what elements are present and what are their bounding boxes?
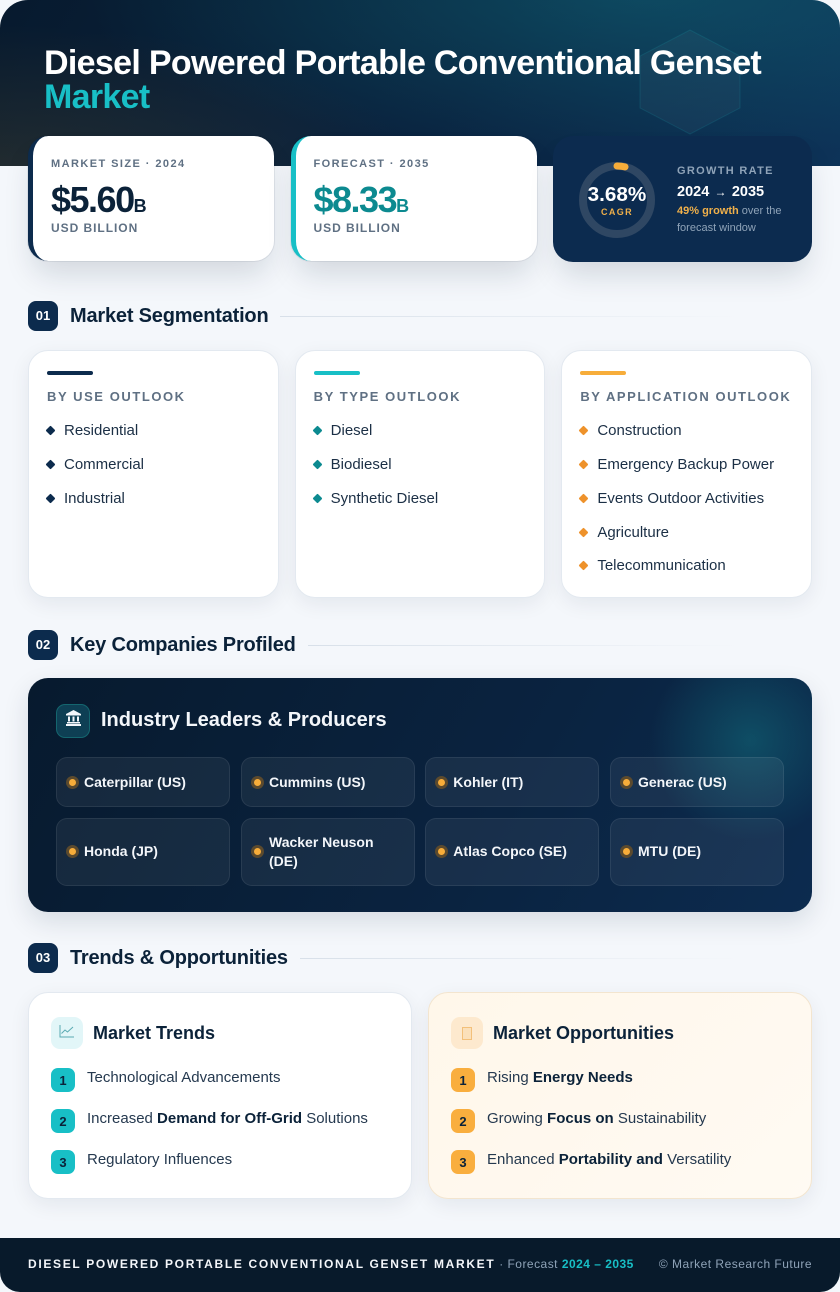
KPI card: forecast 2035: $8.33B xyxy=(314,179,409,220)
CAGR ring xyxy=(579,162,655,238)
title: Market xyxy=(44,78,150,116)
panel: market trends xyxy=(28,992,412,1199)
company chip xyxy=(56,757,230,807)
panel: by type outlook xyxy=(295,350,545,598)
KPI card: market size 2024: USD BILLION xyxy=(51,221,138,235)
section number 03 xyxy=(28,943,58,973)
panel: by use outlook: Commercial xyxy=(64,456,144,473)
section number 01: 01 xyxy=(36,308,50,323)
panel: market trends: Increased Demand for Off-Grid Solutions xyxy=(87,1110,368,1127)
growth note: 49% growth over the xyxy=(677,205,782,217)
CAGR value: 3.68% xyxy=(588,183,646,206)
icon: institution xyxy=(56,704,90,738)
company chip: Atlas Copco (SE) xyxy=(453,843,567,859)
panel: industry leaders xyxy=(28,678,812,912)
section number 01 xyxy=(28,301,58,331)
KPI card: market size 2024: $5.60B xyxy=(51,179,147,220)
panel: by type outlook: Biodiesel xyxy=(331,456,392,473)
trend 1 xyxy=(51,1068,75,1092)
panel: by type outlook: Diesel xyxy=(331,422,372,439)
company chip xyxy=(610,818,784,886)
title xyxy=(44,44,762,116)
panel: by use outlook xyxy=(28,350,279,598)
growth note xyxy=(677,205,782,234)
company chip: Generac (US) xyxy=(638,774,727,790)
CAGR label: CAGR xyxy=(601,207,633,217)
header banner xyxy=(0,0,840,166)
footer title: DIESEL POWERED PORTABLE CONVENTIONAL GENSET MARKET · Forecast 2024 – 2035 xyxy=(28,1257,634,1271)
panel: market opportunities: Rising Energy Needs xyxy=(487,1069,633,1086)
heading: trends: Trends & Opportunities xyxy=(70,947,288,969)
company chip: MTU (DE) xyxy=(638,843,701,859)
panel: by application outlook: Agriculture xyxy=(597,524,669,541)
section number 02 xyxy=(28,630,58,660)
trend 2: 2 xyxy=(59,1114,67,1129)
icon: opportunity glyph xyxy=(451,1017,483,1049)
company chip: Kohler (IT) xyxy=(453,774,523,790)
opportunity 3: 3 xyxy=(459,1155,467,1170)
section number 02: 02 xyxy=(36,637,50,652)
panel: by type outlook: BY TYPE OUTLOOK xyxy=(314,389,461,404)
panel: market opportunities xyxy=(428,992,812,1199)
KPI card: market size 2024 xyxy=(28,136,274,261)
growth rate label: GROWTH RATE xyxy=(677,165,774,177)
panel: market trends: Regulatory Influences xyxy=(87,1151,232,1168)
panel: by application outlook: Emergency Backup Power xyxy=(597,456,774,473)
panel: by application outlook: BY APPLICATION OUTLOOK xyxy=(580,389,791,404)
card heading: Market Trends xyxy=(93,1023,215,1043)
KPI card: market size 2024: MARKET SIZE · 2024 xyxy=(51,158,186,170)
panel: market trends: Technological Advancements xyxy=(87,1069,280,1086)
panel: by application outlook: Telecommunication xyxy=(597,557,726,574)
icon: hexagon watermark xyxy=(640,30,740,134)
trend 3: 3 xyxy=(59,1155,67,1170)
panel: by application outlook xyxy=(561,350,812,598)
trend 2 xyxy=(51,1109,75,1133)
opportunity 2 xyxy=(451,1109,475,1133)
company chip: Caterpillar (US) xyxy=(84,774,186,790)
growth years: → xyxy=(715,185,727,199)
panel heading: Industry Leaders & Producers xyxy=(101,709,387,731)
panel: by use outlook: BY USE OUTLOOK xyxy=(47,389,186,404)
KPI card: forecast 2035: FORECAST · 2035 xyxy=(314,158,430,170)
panel: by use outlook: Industrial xyxy=(64,490,125,507)
company chip: Cummins (US) xyxy=(269,774,365,790)
company chip xyxy=(241,757,415,807)
title: Diesel Powered Portable Conventional Genset xyxy=(44,44,761,82)
footer xyxy=(0,1238,840,1292)
icon: line chart xyxy=(51,1017,83,1049)
panel: by type outlook: Synthetic Diesel xyxy=(331,490,438,507)
company chip xyxy=(425,818,599,886)
company chip: (DE) xyxy=(269,852,298,868)
company chip xyxy=(610,757,784,807)
panel: market opportunities: Growing Focus on Sustainability xyxy=(487,1110,706,1127)
card heading: Market Opportunities xyxy=(493,1023,674,1043)
KPI card: forecast 2035: USD BILLION xyxy=(314,221,401,235)
growth years: 2024 2035 xyxy=(677,184,764,200)
trend 3 xyxy=(51,1150,75,1174)
panel: by application outlook: Construction xyxy=(597,422,682,439)
growth note: forecast window xyxy=(677,222,756,234)
footer credit: © Market Research Future xyxy=(659,1257,812,1271)
heading: key companies: Key Companies Profiled xyxy=(70,634,296,656)
section number 03: 03 xyxy=(36,950,50,965)
company chip xyxy=(56,818,230,886)
panel: market opportunities: Enhanced Portability and Versatility xyxy=(487,1151,731,1168)
KPI card: CAGR growth rate xyxy=(553,136,812,262)
company chip xyxy=(241,818,415,886)
panel: by use outlook: Residential xyxy=(64,422,138,439)
trend 1: 1 xyxy=(59,1073,67,1088)
panel: by application outlook: Events Outdoor Activities xyxy=(597,490,764,507)
opportunity 2: 2 xyxy=(459,1114,467,1129)
heading: market segmentation: Market Segmentation xyxy=(70,305,268,327)
company chip xyxy=(425,757,599,807)
company chip: Honda (JP) xyxy=(84,843,158,859)
company chip: Wacker Neuson xyxy=(269,834,374,850)
opportunity 1: 1 xyxy=(459,1073,467,1088)
opportunity 3 xyxy=(451,1150,475,1174)
KPI card: forecast 2035 xyxy=(290,136,536,261)
opportunity 1 xyxy=(451,1068,475,1092)
